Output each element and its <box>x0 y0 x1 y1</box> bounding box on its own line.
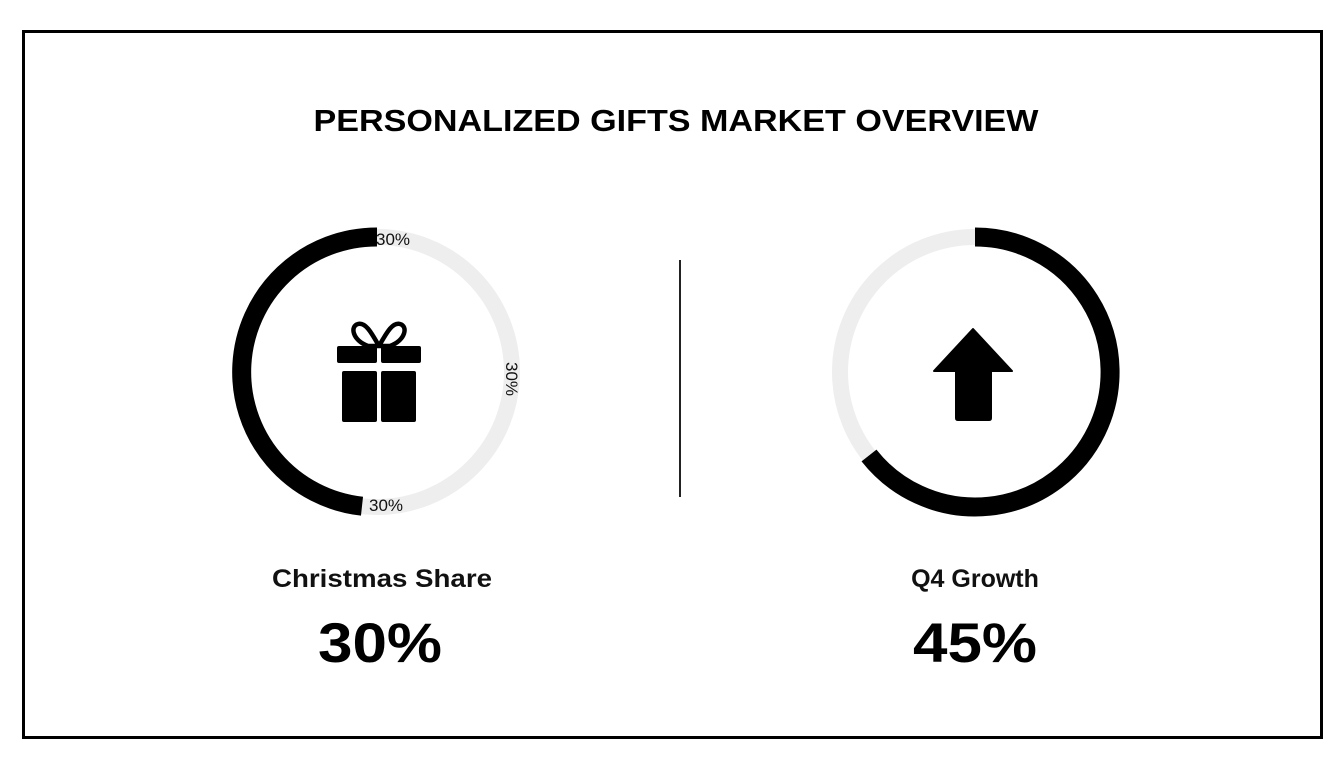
ring: christmas share <box>242 237 512 507</box>
label: Q4 Growth: Q4 Growth <box>911 565 1039 593</box>
ring label bottom: 30% <box>369 496 403 515</box>
value: 30%: 30% <box>318 611 442 674</box>
label: Christmas Share: Christmas Share <box>272 565 492 593</box>
title: PERSONALIZED GIFTS MARKET OVERVIEW <box>314 103 1039 138</box>
ring label right: 30% <box>502 362 521 396</box>
ring label top: 30% <box>376 230 410 249</box>
value: 45%: 45% <box>913 611 1037 674</box>
panel: Q4 growth <box>840 237 1110 674</box>
icon: gift <box>337 324 421 422</box>
panel: christmas share <box>242 230 521 674</box>
divider <box>679 260 681 497</box>
icon: up arrow <box>934 329 1012 420</box>
ring: Q4 growth <box>840 237 1110 507</box>
